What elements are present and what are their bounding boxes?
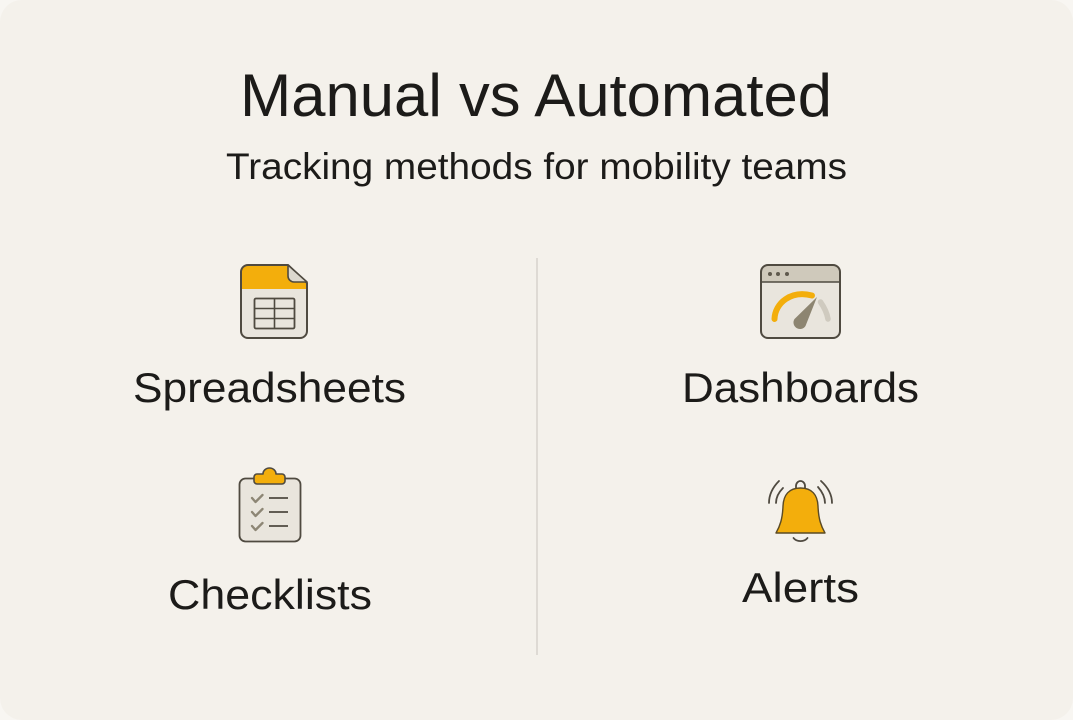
icon: dashboard gauge: [761, 265, 840, 338]
label: alerts: Alerts: [742, 564, 859, 611]
title: Manual vs Automated: [240, 62, 832, 129]
subtitle: Tracking methods for mobility teams: [226, 146, 847, 187]
label: dashboards: Dashboards: [682, 364, 919, 411]
label: spreadsheets: Spreadsheets: [133, 364, 406, 411]
icon: checklist: [240, 468, 300, 542]
panel: manual methods: [133, 265, 406, 618]
icon: alert bell: [769, 481, 832, 541]
label: checklists: Checklists: [168, 571, 372, 618]
icon: spreadsheet: [241, 265, 307, 338]
panel: automated methods: [682, 265, 919, 611]
